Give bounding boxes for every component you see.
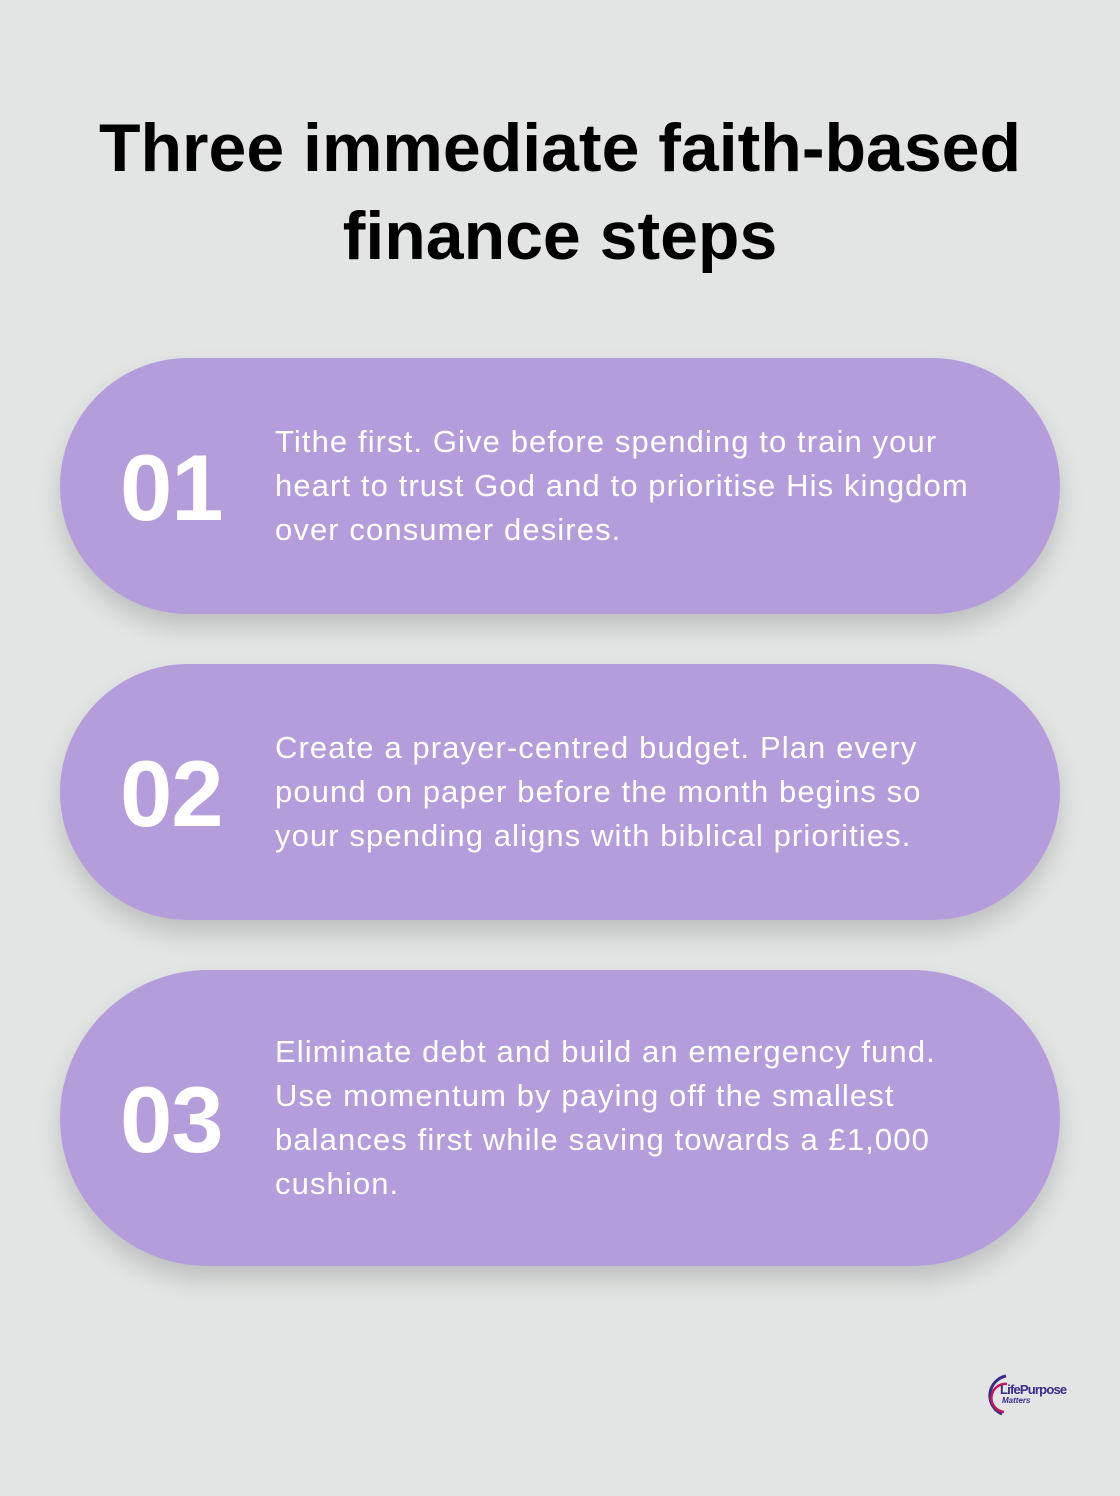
title: finance steps — [343, 198, 777, 274]
text step 2: your spending aligns with biblical priorities. — [275, 818, 911, 853]
number 03: 03 — [120, 1067, 223, 1172]
logo: LifePurpose — [1000, 1382, 1066, 1397]
text step 1: heart to trust God and to prioritise His kingdom — [275, 468, 969, 503]
logo: Matters — [1002, 1396, 1030, 1405]
title — [99, 110, 1021, 274]
panel: step 3 — [60, 970, 1060, 1266]
panel: step 2 — [60, 664, 1060, 920]
text step 2: Create a prayer-centred budget. Plan every — [275, 730, 917, 765]
logo — [988, 1374, 1067, 1416]
text step 3: Eliminate debt and build an emergency fund. — [275, 1034, 936, 1069]
text step 2 — [275, 730, 922, 853]
text step 3 — [275, 1034, 936, 1201]
panel: step 1 — [60, 358, 1060, 614]
text step 3: balances first while saving towards a £1,000 — [275, 1122, 930, 1157]
text step 2: pound on paper before the month begins so — [275, 774, 922, 809]
text step 1: Tithe first. Give before spending to train your — [275, 424, 937, 459]
number 02: 02 — [120, 741, 223, 846]
text step 1 — [275, 424, 969, 547]
text step 3: cushion. — [275, 1166, 399, 1201]
text step 1: over consumer desires. — [275, 512, 621, 547]
number 01: 01 — [120, 435, 223, 540]
title: Three immediate faith-based — [99, 110, 1021, 186]
text step 3: Use momentum by paying off the smallest — [275, 1078, 895, 1113]
